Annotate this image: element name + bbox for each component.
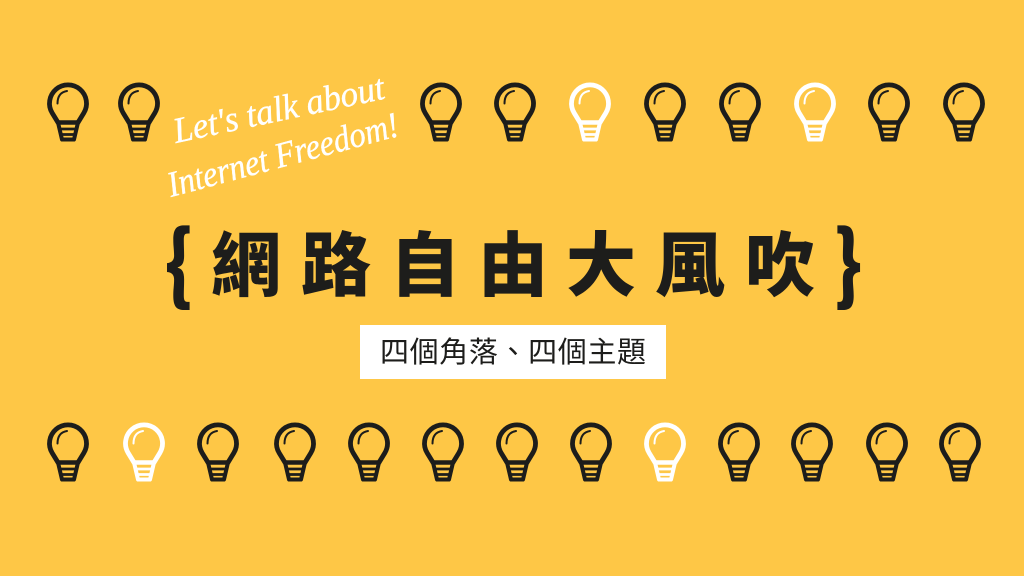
title: } [833,195,863,320]
title: 路 [301,227,371,305]
title: 網 [211,227,281,305]
title: 由 [478,227,548,305]
title: 大 [566,227,636,305]
title: 自 [390,227,460,305]
bottom row of light bulbs [50,425,978,480]
subtitle box [360,325,666,379]
title: 風 [655,227,725,305]
handwritten tagline: Let's talk about [168,67,389,151]
handwritten tagline: Internet Freedom! [162,104,403,205]
title [164,195,863,320]
title: { [164,195,194,320]
subtitle box: 四個角落、四個主題 [380,336,646,369]
top row of light bulbs [50,85,982,140]
title: 吹 [745,227,815,305]
